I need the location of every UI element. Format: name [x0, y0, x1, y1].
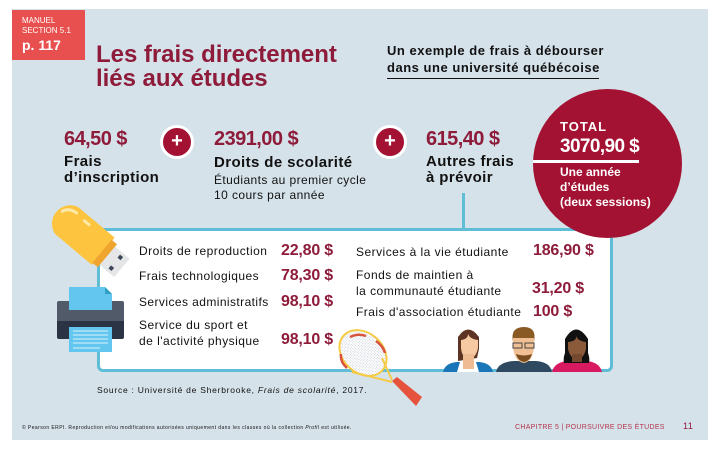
amount: 98,10 $	[281, 331, 333, 348]
label: Services administratifs	[139, 295, 269, 309]
subtitle: dans une université québécoise	[387, 60, 600, 75]
item: other fees	[426, 128, 514, 186]
label	[356, 268, 502, 298]
item: tuition	[214, 128, 366, 202]
total circle: 3070,90 $	[560, 136, 639, 157]
title	[96, 41, 337, 92]
total circle	[533, 89, 682, 238]
item: registration fees	[64, 128, 159, 186]
item: registration fees: Frais	[64, 153, 102, 170]
amount: 22,80 $	[281, 242, 333, 259]
total circle: TOTAL	[560, 119, 607, 134]
label: Frais d'association étudiante	[356, 305, 521, 319]
left column fee labels: Droits de reproduction	[139, 244, 267, 258]
copyright: © Pearson ERPI. Reproduction et/ou modifications autorisées uniquement dans les classes où la collection Profil est utilisée.	[22, 425, 352, 431]
total circle: d’études	[560, 180, 609, 194]
item: other fees: à prévoir	[426, 169, 493, 186]
details box	[97, 228, 613, 372]
plus icon 1: +	[171, 130, 183, 152]
page number: 11	[683, 421, 693, 431]
plus icon 2: +	[384, 130, 396, 152]
total circle: Une année	[560, 165, 621, 179]
chapter footer: CHAPITRE 5 | POURSUIVRE DES ÉTUDES	[515, 424, 665, 431]
manual section tag: SECTION 5.1	[22, 26, 71, 35]
item: other fees: Autres frais	[426, 153, 514, 170]
plus icon 1	[160, 125, 194, 159]
item: tuition: Droits de scolarité	[214, 154, 352, 171]
item: tuition: 10 cours par année	[214, 188, 325, 202]
plus icon 2	[373, 125, 407, 159]
connector line	[462, 193, 465, 230]
item: tuition: 2391,00 $	[214, 128, 298, 150]
item: registration fees: 64,50 $	[64, 128, 127, 150]
manual section tag: p. 117	[22, 37, 61, 53]
item: tuition: Étudiants au premier cycle	[214, 173, 366, 187]
amount: 78,30 $	[281, 267, 333, 284]
title: Les frais directement	[96, 41, 337, 68]
source: Source : Université de Sherbrooke, Frais de scolarité, 2017.	[97, 385, 367, 395]
item: other fees: 615,40 $	[426, 128, 499, 150]
label: Services à la vie étudiante	[356, 245, 509, 259]
amount: 31,20 $	[532, 280, 584, 297]
subtitle	[387, 42, 599, 79]
subtitle: Un exemple de frais à débourser	[387, 43, 604, 58]
amount: 98,10 $	[281, 293, 333, 310]
manual section tag: MANUEL	[22, 16, 55, 25]
label: Service du sport et	[139, 318, 248, 332]
title: liés aux études	[96, 65, 268, 92]
amount: 100 $	[533, 303, 572, 320]
label: Frais technologiques	[139, 269, 259, 283]
label: de l'activité physique	[139, 334, 260, 348]
label	[139, 318, 260, 348]
label: Fonds de maintien à	[356, 268, 474, 282]
total circle: (deux sessions)	[560, 195, 651, 209]
item: registration fees: d’inscription	[64, 169, 159, 186]
manual section tag	[12, 10, 85, 60]
label: la communauté étudiante	[356, 284, 502, 298]
amount: 186,90 $	[533, 242, 594, 259]
